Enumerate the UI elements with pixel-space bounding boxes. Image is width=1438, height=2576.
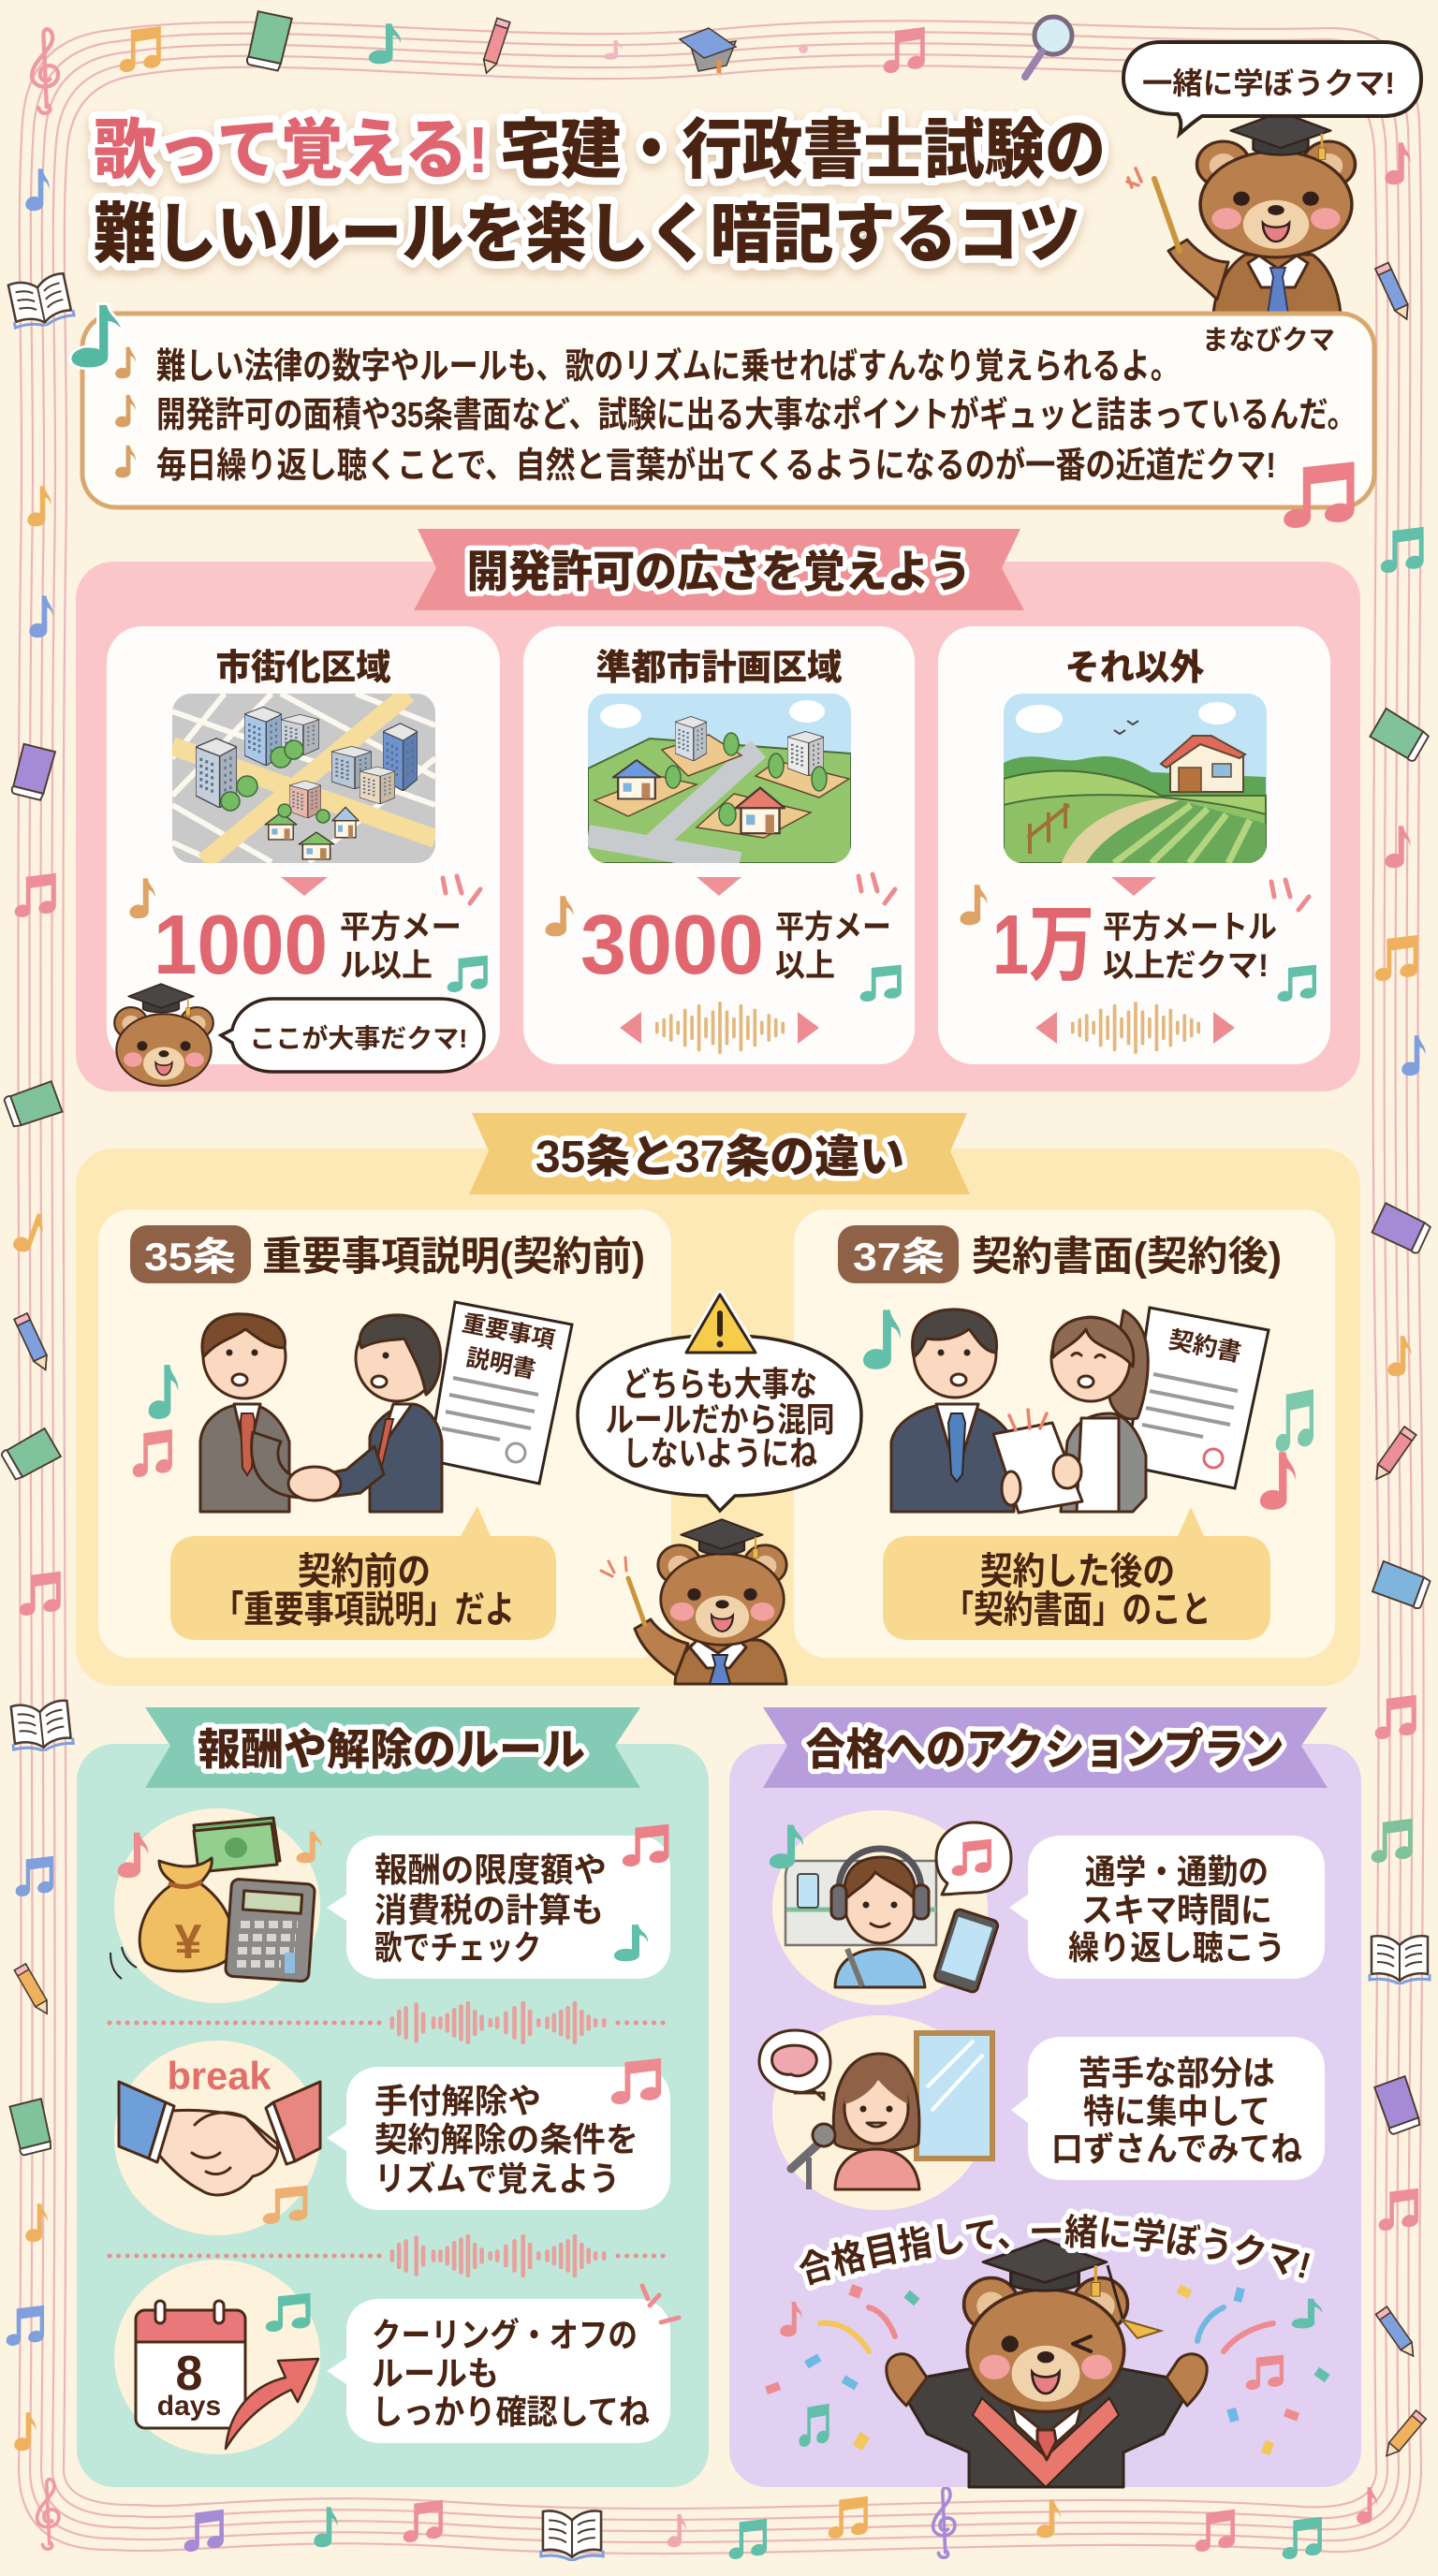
decorative icons: bottom edge	[37, 2480, 1377, 2561]
card: それ以外	[938, 626, 1330, 1064]
icon: teal note	[770, 1825, 803, 1868]
name: まなびクマ: まなびクマ	[1202, 325, 1335, 356]
value: 1000: 平方メー	[340, 910, 462, 945]
bubble: 特に集中して	[1083, 2092, 1270, 2130]
decorative icons: top edge	[32, 11, 1072, 113]
card: 準都市計画区域: 準都市計画区域	[595, 649, 843, 688]
heading: 契約書面(契約後)	[972, 1235, 1282, 1280]
sparks	[443, 876, 480, 903]
icon: money bag: ¥	[175, 1915, 202, 1969]
icon: teal notes	[266, 2293, 311, 2332]
icon: teal notes	[860, 965, 902, 1002]
value: 3000: 以上	[775, 948, 835, 984]
bubble	[327, 2058, 670, 2210]
mascot: teaching bear (top)	[1127, 112, 1355, 315]
bubble: 繰り返し聴こう	[1068, 1928, 1285, 1967]
arrow down	[1111, 877, 1156, 896]
speech bubble: どちらも大事な: どちらも大事な	[623, 1365, 817, 1403]
callout: 契約した後	[883, 1507, 1270, 1640]
illustration: countryside	[1004, 694, 1267, 863]
icon: notes	[118, 1833, 148, 1878]
sparks	[858, 874, 895, 903]
bubble: スキマ時間に	[1081, 1891, 1272, 1929]
icon: handshake	[119, 2082, 320, 2195]
value: 1万: 1万	[992, 899, 1094, 992]
bubble: 通学・通勤の	[1085, 1852, 1269, 1891]
icon: pink note	[1260, 1452, 1296, 1510]
bullet notes	[115, 347, 136, 477]
ribbon heading: 報酬や解除のルール	[198, 1725, 585, 1774]
icon: mirror	[917, 2033, 992, 2159]
speech bubble: どちらも大事な: ルールだから混同	[605, 1400, 835, 1439]
icon: teal notes	[1276, 1389, 1313, 1452]
divider: waveform	[110, 2003, 670, 2042]
value: 3000	[580, 899, 891, 992]
icon: orange note	[129, 878, 155, 918]
bubble	[327, 1824, 670, 1979]
ribbon heading	[763, 1707, 1328, 1788]
icon: red arrow	[226, 2359, 318, 2449]
bubble: 報酬の限度額や	[374, 1851, 607, 1889]
panel: 開発許可の広さ	[76, 529, 1360, 1091]
icon: orange note	[960, 885, 987, 925]
confetti and notes	[765, 2284, 1330, 2455]
bubble: リズムで覚えよう	[374, 2159, 620, 2198]
icon: orange notes	[263, 2186, 308, 2224]
card: 準都市計画区域	[523, 626, 915, 1064]
speech bubble: ここが大事だクマ!: ここが大事だクマ!	[249, 1023, 468, 1053]
icon: calendar: days	[157, 2391, 221, 2422]
panel: 35条と37条の違い	[76, 1113, 1360, 1686]
speech bubble: どちらも大事な	[578, 1336, 861, 1511]
callout: 契約した後: 「契約書面」のこと	[944, 1589, 1211, 1631]
value: 1万: 以上だクマ!	[1103, 948, 1269, 984]
illustration: contract people	[891, 1310, 1148, 1513]
illustration: suburban town	[588, 694, 851, 863]
bubble: 歌でチェック	[374, 1928, 541, 1967]
callout: 契約前	[170, 1506, 556, 1640]
arrow down	[281, 877, 328, 896]
icon: music speech bubble	[936, 1822, 1011, 1895]
title	[94, 113, 1106, 271]
icon: money bag	[139, 1858, 233, 1971]
badge: 37条	[838, 1225, 959, 1283]
icon: document: 説明書	[464, 1344, 537, 1383]
icon: microphone	[791, 2124, 835, 2189]
callout: 契約した後: 契約した後の	[980, 1551, 1175, 1592]
icon: teal notes	[1278, 965, 1316, 1002]
illustration: handshake people	[200, 1314, 442, 1512]
speech bubble: 一緒に学ぼうクマ!	[1123, 42, 1421, 134]
icon: calculator	[225, 1879, 315, 1982]
illustration: train and listener	[785, 1849, 936, 1987]
card: 37条	[794, 1209, 1335, 1658]
icon: calendar: 8	[176, 2347, 202, 2401]
icon: bills	[194, 1818, 280, 1872]
waveform	[620, 1003, 819, 1052]
ribbon heading	[414, 529, 1024, 610]
bubble: 口ずさんでみてね	[1051, 2130, 1302, 2168]
bubble: 苦手な部分は	[1078, 2054, 1275, 2092]
icon: warning	[686, 1295, 756, 1353]
value: 3000: 3000	[580, 899, 764, 992]
bubble: 手付解除や	[374, 2082, 541, 2120]
arched text: 合格目指して: 合格目指して、一緒に学ぼうクマ!	[794, 2208, 1314, 2291]
mascot: graduation bear	[887, 2240, 1207, 2487]
bubble	[327, 2286, 679, 2443]
mascot: small bear	[114, 984, 213, 1086]
icon: document: 重要事項	[460, 1310, 557, 1354]
callout: 契約前: 契約前の	[298, 1551, 431, 1592]
icon: pink note	[1284, 461, 1355, 528]
icon: teal notes	[448, 956, 488, 992]
value: 1000	[154, 899, 462, 992]
value: 1000: ル以上	[340, 948, 433, 984]
badge: 37条: 37条	[853, 1235, 945, 1279]
speech bubble: 一緒に学ぼうクマ!: 一緒に学ぼうクマ!	[1142, 66, 1395, 100]
ribbon heading	[145, 1707, 640, 1788]
text block: intro lines: 難しい法律の数字やルールも、歌のリズムに乗せればすんなり覚えられるよ。	[156, 346, 1180, 387]
icon: document	[1126, 1308, 1269, 1488]
callout: 契約前: 「重要事項説明」だよ	[213, 1589, 515, 1631]
label: break: break	[167, 2054, 271, 2098]
decorative icons: right edge	[1370, 142, 1431, 2460]
icon: brain bubble	[759, 2030, 830, 2100]
icon: orange note	[546, 896, 573, 936]
icon: big teal note	[70, 304, 123, 369]
panel: 合格へのアクションプラン	[729, 1707, 1361, 2488]
bubble: ルールも	[372, 2354, 499, 2393]
value: 3000: 平方メー	[775, 910, 891, 945]
card: 35条	[98, 1209, 671, 1658]
row: クーリング・オフ	[114, 2260, 679, 2454]
sparks	[1271, 880, 1309, 910]
badge: 35条	[130, 1225, 251, 1283]
icon: document: 契約書	[1167, 1325, 1243, 1367]
icon: calendar	[136, 2301, 245, 2428]
text block: intro lines	[156, 346, 1357, 486]
ribbon heading	[469, 1113, 970, 1194]
title: 難しいルールを楽しく暗記するコツ	[94, 198, 1080, 271]
icon: teal note	[149, 1365, 178, 1419]
icon: teal note	[863, 1310, 901, 1369]
bubble: しっかり確認してね	[372, 2393, 650, 2431]
bubble: 消費税の計算も	[374, 1891, 604, 1929]
row: 解除	[114, 2041, 670, 2235]
row: 報酬	[110, 1808, 670, 2003]
speech bubble: ここが大事だクマ!	[221, 999, 484, 1072]
ribbon heading: 開発許可の広さを覚えよう	[466, 547, 972, 596]
mascot: pointing bear	[601, 1519, 786, 1684]
intro box	[70, 304, 1374, 528]
card: それ以外: それ以外	[1065, 649, 1204, 688]
illustration: singer	[833, 2054, 919, 2189]
heading: 重要事項説明(契約前)	[262, 1235, 645, 1280]
ribbon heading: 合格へのアクションプラン	[805, 1725, 1284, 1774]
icon: tablet	[933, 1909, 999, 1993]
panel: 報酬や解除のルール	[77, 1707, 709, 2487]
waveform	[1035, 1003, 1235, 1052]
illustration: city	[172, 694, 435, 863]
title: 歌って覚える!	[94, 113, 489, 186]
row: 通学	[770, 1810, 1325, 2005]
bubble: クーリング・オフの	[372, 2316, 638, 2354]
value: 1万	[992, 899, 1277, 992]
bubble	[1009, 1836, 1325, 1979]
ribbon heading: 35条と37条の違い	[536, 1133, 904, 1182]
icon: document	[429, 1302, 572, 1484]
card: 市街化区域: 市街化区域	[215, 649, 391, 688]
speech bubble: どちらも大事な: しないようにね	[623, 1434, 817, 1472]
icon: pink notes	[133, 1429, 172, 1477]
divider: waveform	[110, 2236, 670, 2276]
value: 1万: 平方メートル	[1103, 910, 1277, 945]
decorative icons: left edge	[1, 168, 75, 2451]
row: 苦手	[759, 2015, 1325, 2210]
arrow down	[697, 877, 741, 896]
card: 市街化区域	[107, 626, 500, 1064]
bubble	[1011, 2037, 1325, 2180]
badge: 35条: 35条	[144, 1235, 236, 1279]
bubble: 契約解除の条件を	[374, 2120, 638, 2159]
title: 宅建・行政書士試験の	[500, 113, 1106, 186]
value: 1000: 1000	[154, 899, 328, 992]
